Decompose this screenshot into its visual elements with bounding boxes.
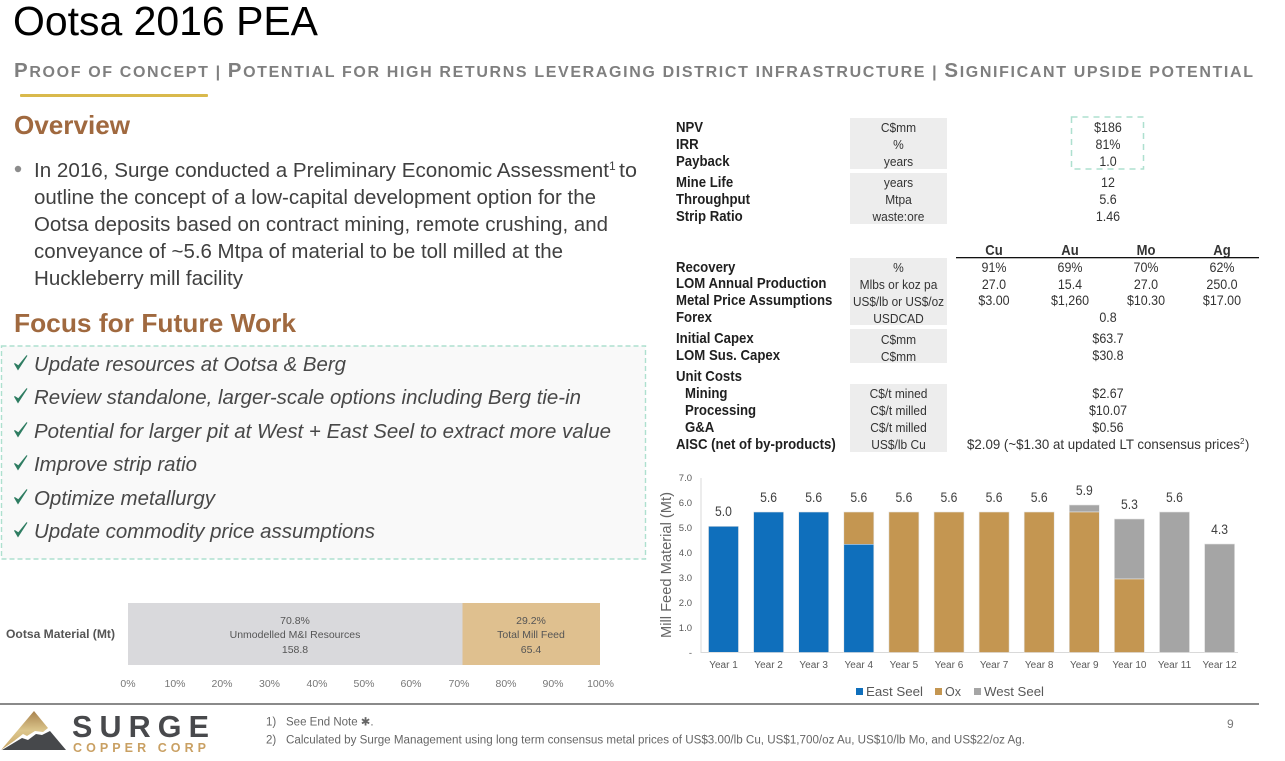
y axis ticks [679, 473, 692, 659]
logo tagline: COPPER CORP [73, 741, 206, 755]
chart: Ootsa material stacked bar [6, 603, 614, 690]
units: % [893, 261, 904, 275]
values: 250.0 [1206, 276, 1238, 292]
row labels: Throughput [676, 190, 750, 207]
row labels: Metal Price Assumptions [676, 291, 833, 308]
text block: overview bullet: In 2016, Surge conducted a Preliminary Economic Assessment [34, 160, 609, 182]
year labels: Year 7 [980, 660, 1009, 671]
y axis ticks: 7.0 [679, 473, 692, 484]
values: 81% [1096, 136, 1121, 152]
year labels: Year 3 [799, 660, 828, 671]
text block: overview bullet: to [619, 160, 637, 182]
dashed highlight [1072, 117, 1144, 169]
bars [708, 505, 1235, 652]
footnotes: See End Note ✱. [286, 716, 374, 728]
values: 1.0 [1099, 153, 1117, 169]
year 5 [889, 512, 919, 652]
logo icon: mountain [1, 711, 66, 750]
metal column headers: Mo [1137, 242, 1155, 258]
footnotes: 2) [266, 734, 276, 746]
values: 15.4 [1058, 276, 1082, 292]
checklist item: strip ratio: Improve strip ratio [34, 454, 197, 476]
y axis ticks: 1.0 [679, 623, 692, 634]
footnotes: 1) [266, 716, 276, 728]
table: project economics [676, 117, 1259, 452]
year labels: Year 2 [754, 660, 783, 671]
y axis ticks: 4.0 [679, 548, 692, 559]
data labels: 5.6 [760, 489, 777, 505]
year labels: Year 8 [1025, 660, 1054, 671]
percent axis: 30% [259, 678, 280, 690]
row labels: Mining [685, 384, 728, 401]
year 11 [1160, 512, 1190, 652]
subtitle: PROOF OF CONCEPT | POTENTIAL FOR HIGH RETURNS LEVERAGING DISTRICT INFRASTRUCTURE | SIGNIFICANT UPSIDE POTENTIAL [14, 59, 1253, 82]
values: $3.00 [978, 292, 1010, 308]
percent axis: 70% [448, 678, 470, 690]
row labels: G&A [685, 418, 714, 435]
logo wordmark: SURGE [72, 710, 209, 744]
row labels: Recovery [676, 258, 736, 275]
text block: overview bullet [15, 159, 637, 290]
segment: unmodelled resources: 70.8% [280, 615, 310, 627]
data labels: 5.9 [1076, 482, 1093, 498]
y axis ticks: 3.0 [679, 573, 692, 584]
row labels: Strip Ratio [676, 207, 743, 224]
units: C$mm [881, 333, 916, 347]
year 9 [1069, 505, 1099, 652]
year 10 [1114, 519, 1144, 652]
percent axis: 20% [211, 678, 233, 690]
percent axis [120, 678, 614, 690]
y axis ticks: 5.0 [679, 523, 692, 534]
row labels: LOM Annual Production [676, 274, 826, 291]
data labels: 5.6 [805, 489, 822, 505]
data labels: 4.3 [1211, 521, 1228, 537]
segment: total mill feed: Total Mill Feed [497, 629, 565, 641]
year labels: Year 10 [1112, 660, 1147, 671]
year labels [709, 660, 1237, 671]
values: $10.30 [1127, 292, 1165, 308]
y axis ticks: 2.0 [679, 598, 692, 609]
values: 27.0 [982, 276, 1006, 292]
text block: overview bullet: Ootsa deposits based on contract mining, remote crushing, and [34, 214, 608, 236]
checklist item: metallurgy: Optimize metallurgy [34, 488, 216, 510]
row labels: AISC (net of by-products) [676, 435, 836, 452]
text block: overview bullet: conveyance of ~5.6 Mtpa of material to be toll milled at the [34, 241, 563, 263]
segment: total mill feed: 65.4 [521, 644, 541, 656]
metal column headers: Cu [985, 242, 1003, 258]
year 6 [934, 512, 964, 652]
values: $0.56 [1092, 419, 1124, 435]
percent axis: 90% [542, 678, 564, 690]
units: C$/t mined [870, 387, 927, 401]
units: % [893, 138, 904, 152]
data labels: 5.6 [1031, 489, 1048, 505]
values: $63.7 [1092, 330, 1124, 346]
units: Mlbs or koz pa [860, 278, 937, 292]
checklist item: larger pit: Potential for larger pit at West + East Seel to extract more value [34, 421, 611, 443]
heading: overview: Overview [14, 110, 131, 140]
footer rule [0, 703, 1259, 705]
chart: mill feed material by year [659, 473, 1238, 699]
values: 0.8 [1099, 309, 1117, 325]
values: $2.09 (~$1.30 at updated LT consensus prices [967, 436, 1240, 452]
year labels: Year 1 [709, 660, 738, 671]
page number: 9 [1227, 717, 1234, 731]
units: years [884, 176, 913, 190]
values: ) [1245, 437, 1249, 452]
row labels: Mine Life [676, 173, 733, 190]
text block: overview bullet: Huckleberry mill facility [34, 268, 243, 290]
legend: East Seel [866, 684, 923, 699]
logo: Surge Copper Corp [1, 710, 209, 755]
values: 1.46 [1096, 208, 1120, 224]
values: 2 [1240, 437, 1245, 446]
year 7 [979, 512, 1009, 652]
segment: total mill feed [462, 603, 600, 665]
gold accent rule [20, 94, 208, 97]
legend: West Seel [984, 684, 1044, 699]
units: C$/t milled [870, 421, 927, 435]
values: 12 [1101, 174, 1115, 190]
metal column headers: Ag [1213, 242, 1231, 258]
units: US$/lb Cu [871, 438, 926, 452]
data labels: 5.6 [986, 489, 1003, 505]
percent axis: 100% [587, 678, 614, 690]
year labels: Year 5 [890, 660, 919, 671]
segment: unmodelled resources: 158.8 [282, 644, 308, 656]
values: $1,260 [1051, 292, 1089, 308]
units: US$/lb or US$/oz [853, 295, 944, 309]
year labels: Year 11 [1158, 660, 1192, 671]
values: 5.6 [1099, 191, 1117, 207]
data labels: 5.6 [895, 489, 912, 505]
year 4 [844, 512, 874, 652]
units: C$/t milled [870, 404, 927, 418]
values: $17.00 [1203, 292, 1241, 308]
row labels: Payback [676, 152, 730, 169]
checklist item: commodity prices: Update commodity price assumptions [34, 521, 375, 543]
values: 69% [1058, 259, 1083, 275]
values [967, 119, 1249, 452]
values: $30.8 [1092, 347, 1124, 363]
checklist item: resources: Update resources at Ootsa & Berg [34, 354, 346, 376]
data labels: 5.6 [941, 489, 957, 505]
units [853, 121, 944, 452]
row labels: IRR [676, 135, 699, 152]
axes [701, 478, 1238, 652]
percent axis: 0% [120, 678, 136, 690]
units: Mtpa [885, 193, 912, 207]
units: waste:ore [872, 210, 924, 224]
values: 27.0 [1134, 276, 1158, 292]
segment: total mill feed: 29.2% [516, 615, 546, 627]
row labels: NPV [676, 118, 704, 135]
row labels: Unit Costs [676, 367, 742, 384]
year 3 [799, 512, 829, 652]
values: $2.67 [1092, 385, 1124, 401]
panel: focus checklist [2, 346, 646, 559]
percent axis: 80% [495, 678, 517, 690]
segment: unmodelled resources: Unmodelled M&I Resources [230, 629, 360, 641]
data labels: 5.3 [1121, 496, 1138, 512]
percent axis: 40% [306, 678, 328, 690]
year labels: Year 6 [935, 660, 964, 671]
year 1 [708, 526, 738, 652]
percent axis: 60% [400, 678, 422, 690]
legend: Ox [945, 684, 961, 699]
metal column headers [956, 242, 1259, 258]
year labels: Year 4 [845, 660, 874, 671]
row labels: Forex [676, 308, 712, 325]
values: $10.07 [1089, 402, 1127, 418]
year labels: Year 12 [1203, 660, 1237, 671]
data labels: 5.6 [850, 489, 867, 505]
year 12 [1205, 544, 1235, 652]
units: USDCAD [873, 312, 924, 326]
text block: overview bullet: 1 [609, 159, 616, 173]
y axis ticks: - [689, 648, 692, 659]
values: $186 [1094, 119, 1122, 135]
row labels: Initial Capex [676, 329, 754, 346]
row labels: Processing [685, 401, 756, 418]
footnotes [266, 716, 1025, 746]
data labels: 5.0 [715, 503, 732, 519]
text block: overview bullet: outline the concept of a low-capital development option for the [34, 187, 596, 209]
legend [856, 684, 1044, 699]
bar label: Ootsa Material (Mt) [6, 629, 115, 641]
year labels: Year 9 [1070, 660, 1099, 671]
values: 91% [982, 259, 1007, 275]
y axis title: Mill Feed Material (Mt) [659, 492, 675, 638]
segment: unmodelled resources [128, 603, 462, 665]
percent axis: 50% [353, 678, 375, 690]
footnotes: Calculated by Surge Management using long term consensus metal prices of US$3.00/lb Cu, US$1,700/oz Au, US$10/lb Mo, and US$22/oz Ag. [286, 734, 1025, 746]
row labels [676, 118, 836, 452]
year 2 [754, 512, 784, 652]
heading: focus for future work: Focus for Future Work [14, 308, 297, 338]
units: years [884, 155, 913, 169]
year 8 [1024, 512, 1054, 652]
units: C$mm [881, 121, 916, 135]
y axis ticks: 6.0 [679, 498, 692, 509]
metal column headers: Au [1061, 242, 1079, 258]
unit column shading [850, 118, 947, 452]
values: 62% [1210, 259, 1235, 275]
data labels [715, 482, 1228, 537]
data labels: 5.6 [1166, 489, 1183, 505]
checklist item: standalone options: Review standalone, larger-scale options including Berg tie-in [34, 387, 581, 409]
row labels: LOM Sus. Capex [676, 346, 780, 363]
values: 70% [1134, 259, 1159, 275]
percent axis: 10% [164, 678, 186, 690]
units: C$mm [881, 350, 916, 364]
